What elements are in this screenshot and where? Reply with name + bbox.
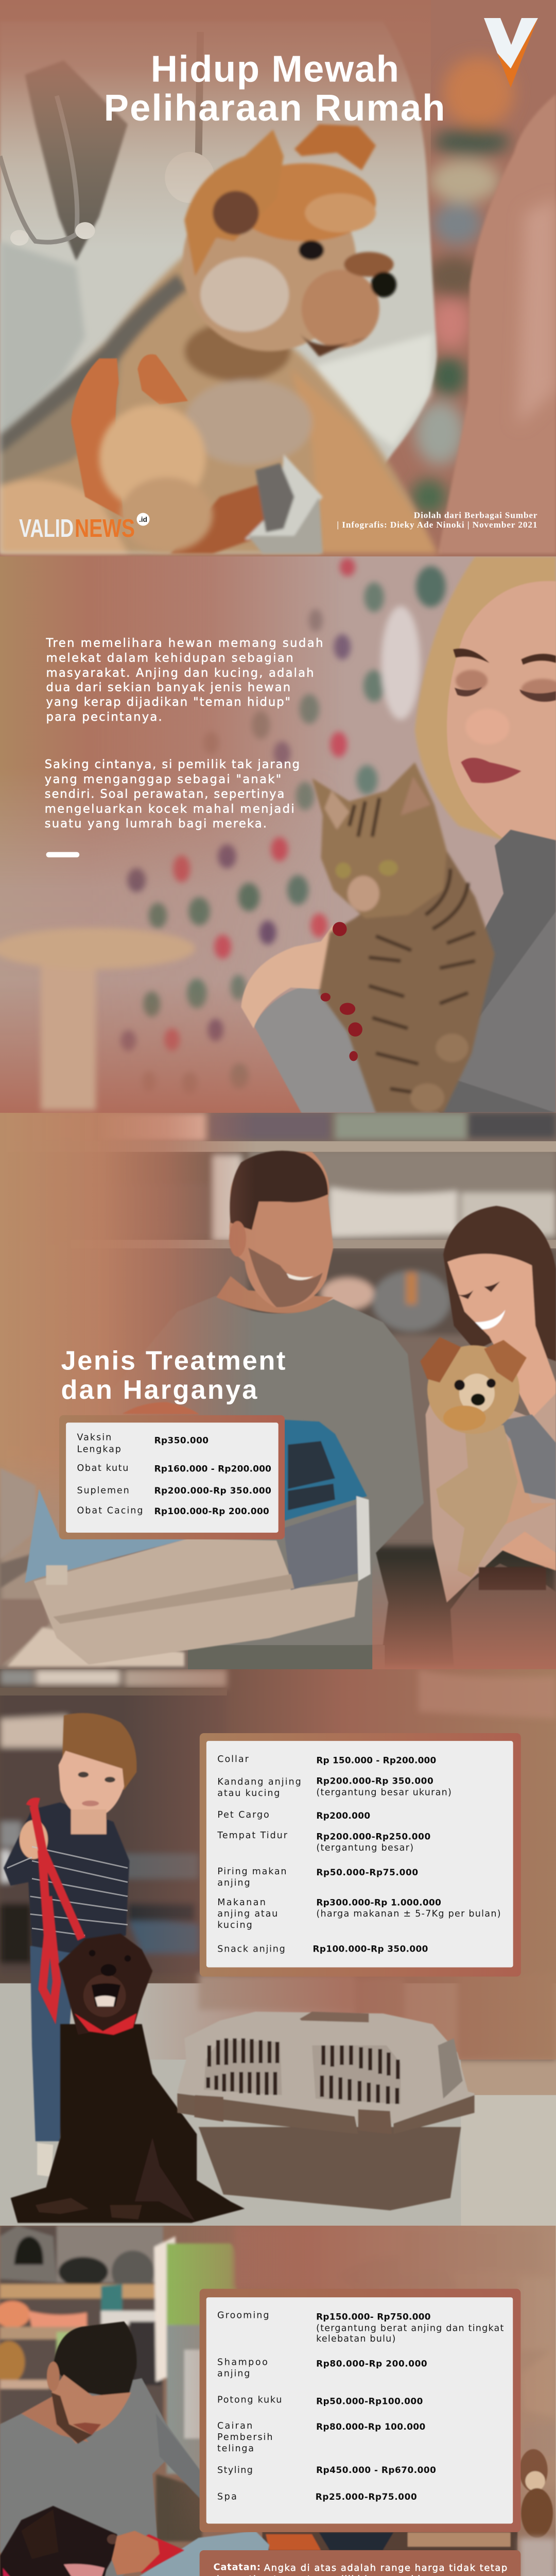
row: cairan: telinga	[217, 2444, 254, 2454]
row: makanan: kucing	[217, 1920, 252, 1930]
cat	[312, 762, 495, 1113]
man's hand and red leash	[112, 2531, 184, 2575]
plush monkey	[519, 2449, 553, 2538]
logo: VALIDNEWS: NEWS	[75, 515, 135, 543]
row: kandang: (tergantung besar ukuran)	[316, 1788, 451, 1798]
section: couple with pet carrier	[0, 1113, 556, 1669]
row: cairan: Rp80.000-Rp 100.000	[316, 2421, 425, 2432]
paragraph two: yang menganggap sebagai "anak"	[45, 773, 281, 786]
row: kandang: Kandang anjing	[217, 1777, 301, 1787]
row: tempat tidur	[217, 1831, 430, 1853]
row: styling: Rp450.000 - Rp670.000	[316, 2465, 436, 2475]
labrador puppy	[0, 2506, 119, 2576]
paragraph two: sendiri. Soal perawatan, sepertinya	[45, 787, 284, 801]
row: snack: Rp100.000-Rp 350.000	[313, 1943, 428, 1954]
bedding bottom left	[0, 1468, 184, 1666]
credit line: Diolah dari Berbagai Sumber	[414, 511, 537, 520]
heading: dan Harganya	[61, 1375, 257, 1405]
section: boy, labrador and carrier	[0, 1669, 556, 2226]
row: styling	[217, 2465, 436, 2476]
paragraph two: Saking cintanya, si pemilik tak jarang	[45, 758, 300, 771]
row: spa: Spa	[217, 2492, 237, 2502]
panel: treatment prices	[59, 1415, 285, 1539]
row: pet cargo	[217, 1810, 370, 1821]
man sweater	[107, 1296, 424, 1649]
row: kandang: Rp200.000-Rp 350.000	[316, 1775, 433, 1786]
row: tempat tidur: Tempat Tidur	[217, 1831, 288, 1841]
row: piring makan: Piring makan	[217, 1867, 287, 1877]
row: grooming: Grooming	[217, 2311, 269, 2321]
row: shampoo: Shampoo	[217, 2358, 268, 2368]
row: obat cacing: Obat Cacing	[77, 1506, 143, 1516]
woman hair	[415, 556, 556, 840]
row: tempat tidur: Rp200.000-Rp250.000	[316, 1832, 430, 1842]
row: obat cacing	[77, 1506, 269, 1516]
section: hero with dog held by vet	[0, 0, 556, 556]
row: piring makan: anjing	[217, 1878, 250, 1888]
logo: VALIDNEWS: .id	[139, 515, 147, 523]
row: obat kutu	[77, 1463, 271, 1473]
title	[106, 55, 443, 121]
row: vaksin: Vaksin	[77, 1433, 111, 1443]
paragraph one: masyarakat. Anjing dan kucing, adalah	[46, 666, 314, 680]
paragraph one: dua dari sekian banyak jenis hewan	[46, 681, 290, 694]
logo: V mark	[484, 18, 538, 88]
paragraph one	[46, 637, 323, 724]
row: potong kuku: Potong kuku	[217, 2395, 282, 2405]
blurred foreground right	[519, 2538, 556, 2576]
heading: Jenis Treatment	[61, 1346, 285, 1376]
section: woman with tabby cat	[0, 556, 556, 1113]
row: cairan: Cairan	[217, 2421, 252, 2431]
row: kandang	[217, 1775, 451, 1799]
paragraph one: yang kerap dijadikan "teman hidup"	[46, 696, 290, 709]
wooden toy display	[262, 2531, 521, 2576]
shelves background	[0, 1113, 556, 1666]
row: snack	[217, 1943, 428, 1954]
man neck and head	[216, 1150, 333, 1313]
woman face	[447, 581, 556, 844]
floor	[0, 1984, 556, 2226]
row: snack: Snack anjing	[217, 1944, 285, 1954]
row: collar: Rp 150.000 - Rp200.000	[316, 1755, 436, 1766]
carrier	[25, 1420, 371, 1665]
row: makanan: (harga makanan ± 5-7Kg per bulan)	[316, 1909, 501, 1919]
red leash	[30, 1802, 81, 2010]
woman sweater	[253, 829, 556, 1113]
row: makanan: anjing atau	[217, 1909, 277, 1919]
row: cairan: Pembersih	[217, 2432, 272, 2443]
woman	[426, 1206, 556, 1669]
row: collar	[217, 1754, 436, 1766]
row: obat kutu: Obat kutu	[77, 1463, 128, 1473]
row: shampoo: Rp80.000-Rp 200.000	[316, 2358, 427, 2368]
row: styling: Styling	[217, 2465, 253, 2476]
carrier: pet cargo	[177, 2012, 475, 2210]
paragraph one: para pecintanya.	[46, 710, 162, 724]
title: Peliharaan Rumah	[104, 88, 445, 129]
man	[0, 2321, 269, 2576]
intro text	[45, 637, 323, 831]
dog body	[0, 256, 438, 553]
row: vaksin: Lengkap	[77, 1444, 121, 1454]
section: man with dog in toy shop	[0, 2226, 556, 2576]
credit line	[337, 511, 537, 530]
paragraph one: melekat dalam kehidupan sebagian	[46, 652, 293, 665]
row: piring makan: Rp50.000-Rp75.000	[316, 1867, 418, 1877]
labrador	[11, 1934, 245, 2223]
cat tree	[0, 928, 195, 1110]
row: makanan: Rp300.000-Rp 1.000.000	[316, 1897, 441, 1908]
title: Hidup Mewah	[151, 48, 399, 90]
row: spa	[217, 2492, 417, 2502]
right sweater	[438, 94, 556, 553]
row: pet cargo: Rp200.000	[316, 1810, 370, 1821]
row: shampoo: anjing	[217, 2369, 250, 2379]
paragraph two: suatu yang lumrah bagi mereka.	[45, 817, 267, 831]
row: grooming: kelebatan bulu)	[316, 2334, 395, 2344]
paragraph two	[45, 758, 300, 831]
row: suplemen: Suplemen	[77, 1485, 129, 1496]
note: catatan	[200, 2550, 520, 2576]
row: obat cacing: Rp100.000-Rp 200.000	[154, 1506, 269, 1516]
vet coat	[0, 21, 437, 553]
row: grooming: Rp150.000- Rp750.000	[316, 2311, 431, 2321]
paragraph one: Tren memelihara hewan memang sudah	[46, 637, 323, 650]
row: vaksin	[77, 1433, 208, 1454]
row: potong kuku	[217, 2395, 423, 2406]
row: spa: Rp25.000-Rp75.000	[316, 2492, 417, 2502]
logo: VALIDNEWS: VALID	[19, 515, 74, 543]
note: catatan: Angka di atas adalah range harga tidak tetap	[264, 2563, 507, 2573]
woman hand	[241, 925, 347, 1028]
row: makanan	[217, 1897, 501, 1930]
forearm and sleeve	[170, 454, 323, 553]
row: piring makan	[217, 1867, 418, 1888]
panel: accessories prices	[200, 1733, 521, 1976]
row: grooming	[217, 2311, 503, 2344]
row: tempat tidur: (tergantung besar)	[316, 1843, 413, 1853]
store shelves	[0, 1669, 556, 2060]
row: kandang: atau kucing	[217, 1788, 280, 1799]
logo: VALIDNEWS	[19, 513, 149, 543]
store background	[0, 2226, 237, 2541]
row: collar: Collar	[217, 1754, 249, 1765]
boy	[4, 1713, 136, 2177]
row: suplemen	[77, 1485, 271, 1496]
note: catatan: Catatan:	[213, 2562, 260, 2573]
row: pet cargo: Pet Cargo	[217, 1810, 269, 1820]
wallpaper spots	[120, 558, 446, 1095]
row: potong kuku: Rp50.000-Rp100.000	[316, 2396, 423, 2406]
hand	[71, 354, 188, 518]
stethoscope	[0, 32, 200, 242]
panel: grooming prices	[200, 2289, 520, 2532]
heading	[61, 1346, 285, 1405]
dog paw	[99, 404, 213, 552]
row: makanan: Makanan	[217, 1897, 266, 1908]
paragraph two: mengeluarkan kocek mahal menjadi	[45, 802, 294, 816]
row: cairan	[217, 2421, 425, 2454]
row: obat kutu: Rp160.000 - Rp200.000	[154, 1463, 271, 1473]
dog head	[183, 124, 396, 357]
red nails	[321, 922, 362, 1061]
row: suplemen: Rp200.000-Rp 350.000	[154, 1485, 271, 1496]
row: grooming: (tergantung berat anjing dan tingkat	[316, 2323, 503, 2333]
row: vaksin: Rp350.000	[154, 1435, 208, 1445]
man's hand on carrier	[123, 1402, 199, 1414]
tie	[25, 60, 128, 261]
credit line: | Infografis: Dieky Ade Ninoki | November 2021	[337, 520, 537, 530]
yorkie	[420, 1337, 556, 1578]
row: shampoo	[217, 2358, 427, 2379]
